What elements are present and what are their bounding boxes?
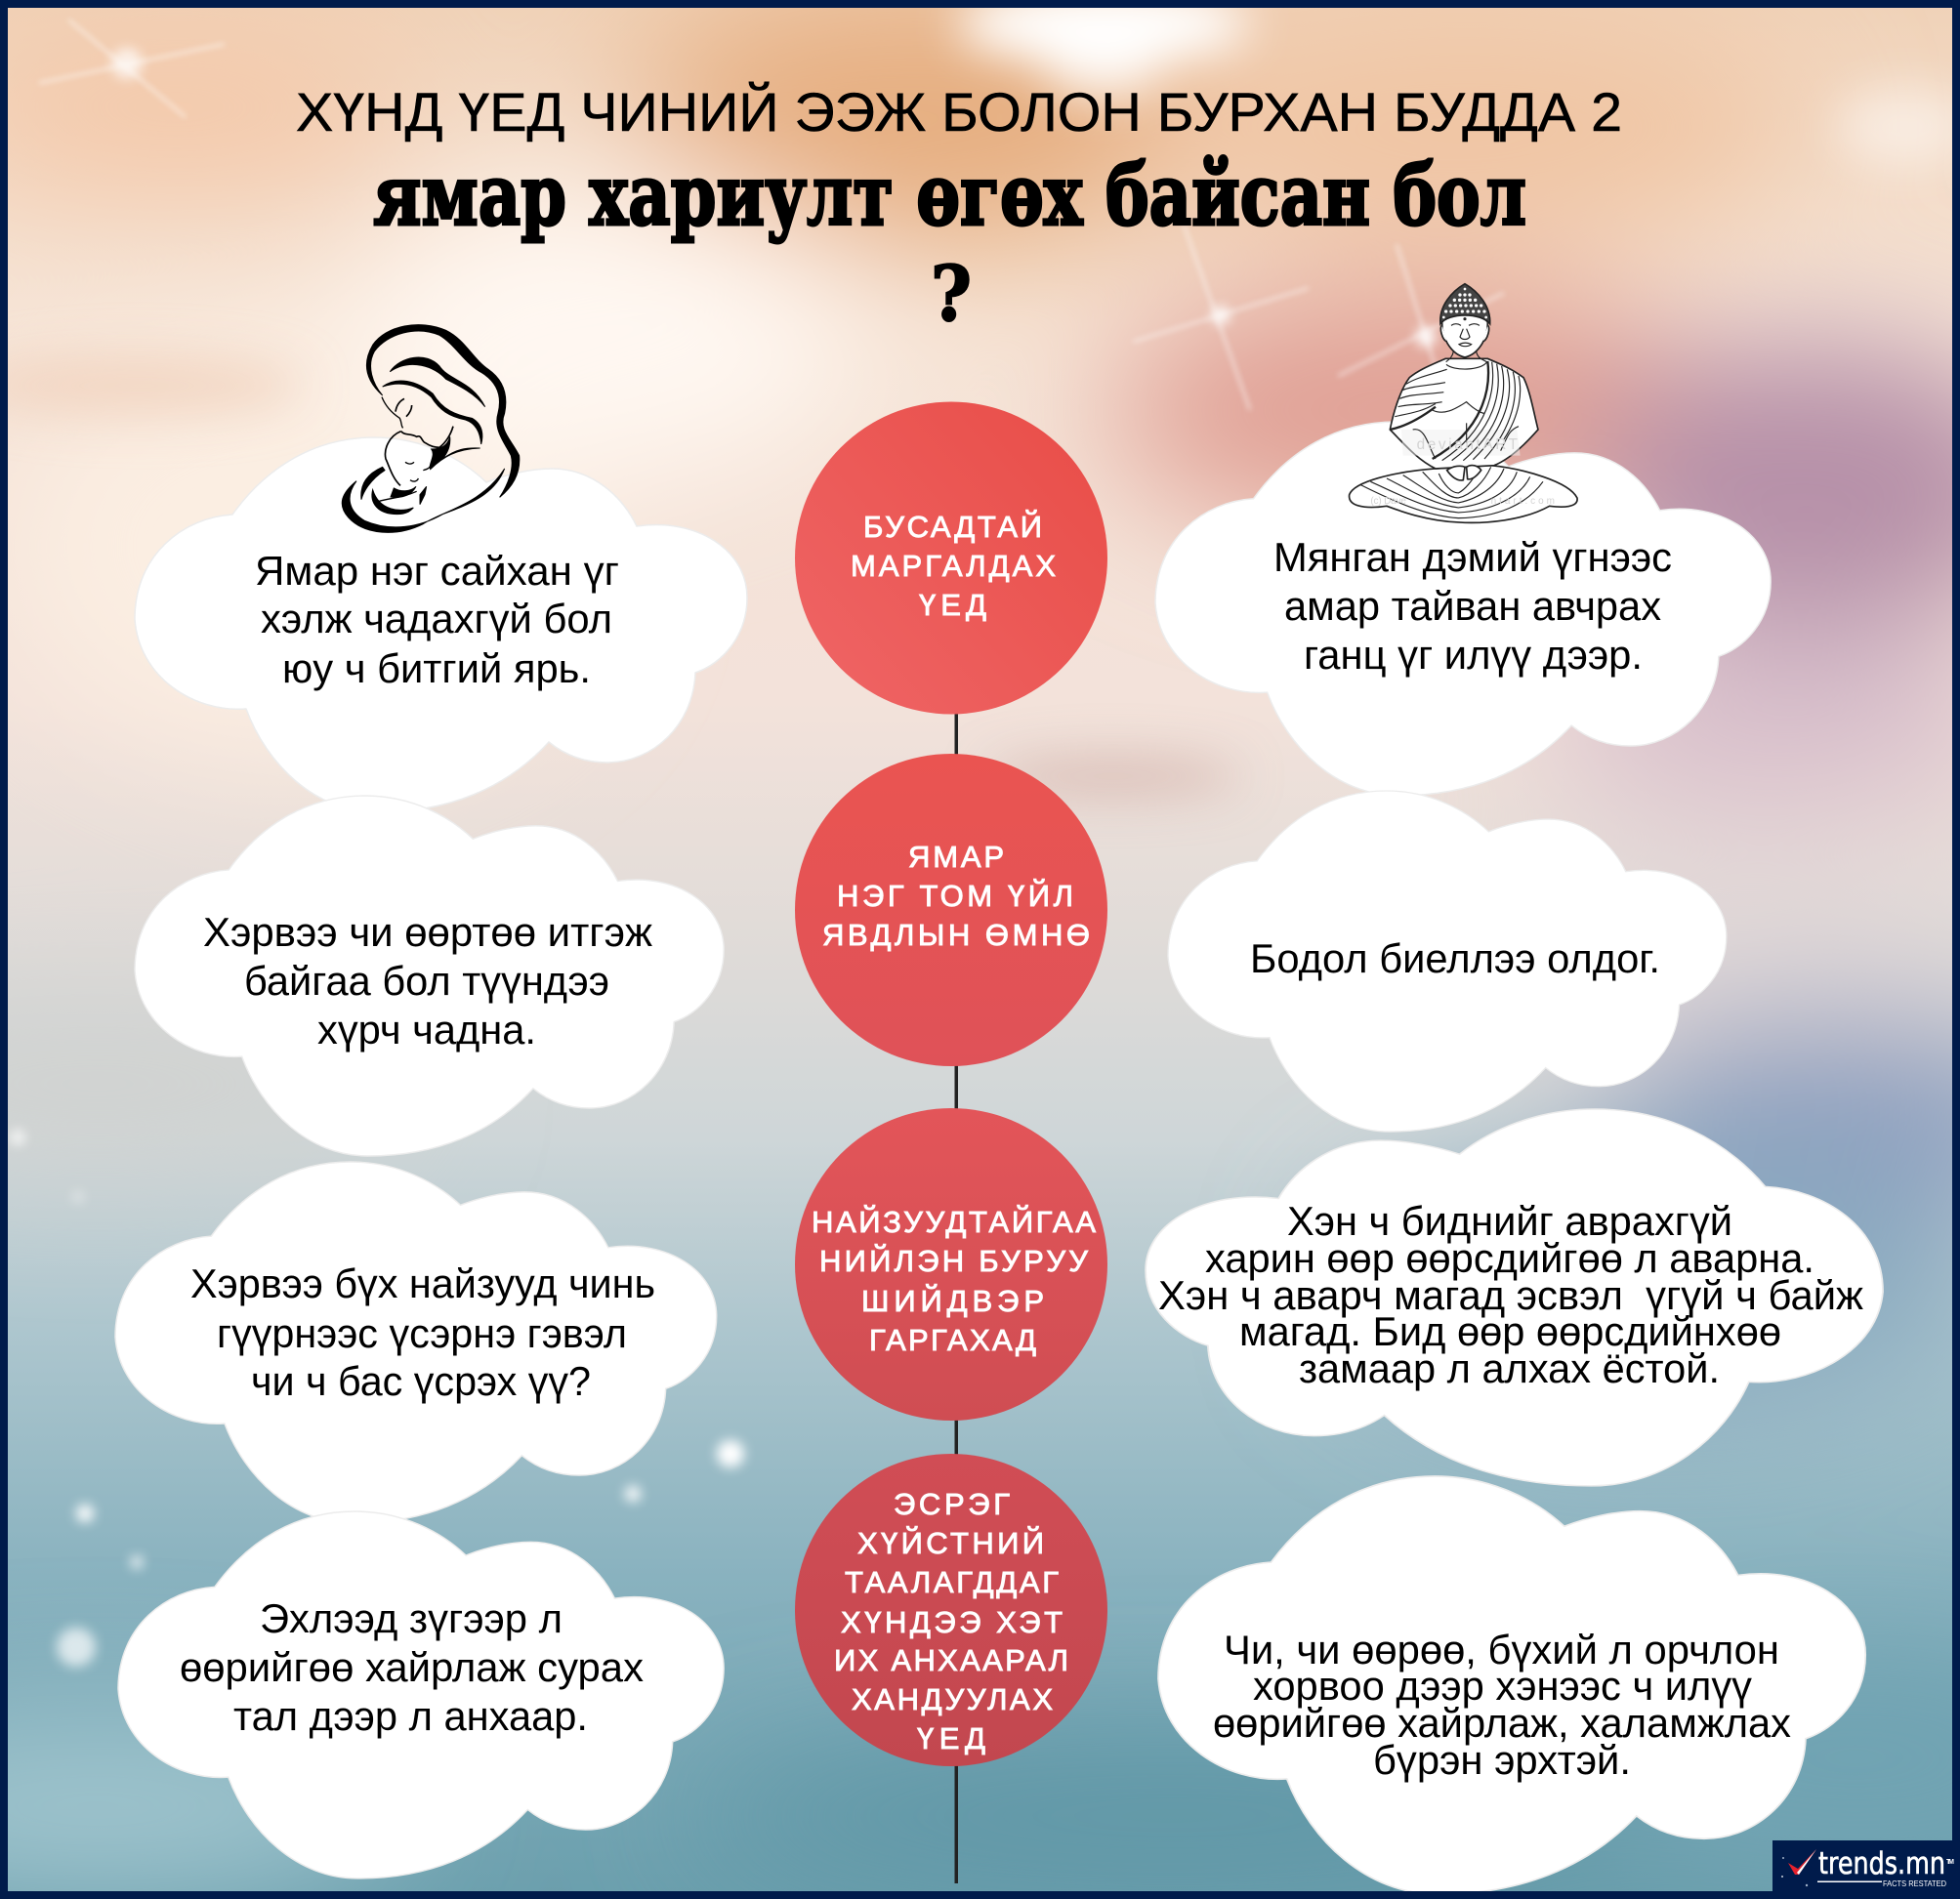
text: right cloud 4: Чи, чи өөрөө, бүхий л орчлон [1224, 1627, 1779, 1672]
logo: trends.mn: TM [1946, 1859, 1954, 1866]
red circle 4: ХҮНДЭЭ ХЭТ [841, 1605, 1063, 1639]
icon part: lap folds [1360, 467, 1543, 518]
red circle 3: ГАРГАХАД [869, 1323, 1036, 1357]
red circle 2: ЯВДЛЫН ӨМНӨ [822, 918, 1090, 952]
title line 1: ХҮНД ҮЕД ЧИНИЙ ЭЭЖ БОЛОН БУРХАН БУДДА 2 [296, 81, 1622, 143]
icon part: robe stripes [1390, 361, 1521, 461]
text: left cloud 2: хүрч чадна. [317, 1007, 536, 1053]
watermark text: (c) Dave [1370, 496, 1406, 507]
text: right cloud 4: хорвоо дээр хэнээс ч илүү [1253, 1663, 1752, 1709]
text: right cloud 1: Мянган дэмий үгнээс [1273, 534, 1672, 580]
text: right cloud 1 [1273, 534, 1672, 678]
title line 2: ямар хариулт өгөх байсан бол [373, 146, 1526, 245]
text: right cloud 3: Хэн ч биднийг аврахгүй [1287, 1198, 1732, 1244]
red circle 3: ШИЙДВЭР [861, 1283, 1044, 1318]
text: right cloud 3: магад. Бид өөр өөрсдийнхөө [1239, 1308, 1781, 1354]
text: left cloud 3: гүүрнээс үсэрнэ гэвэл [217, 1310, 627, 1356]
watermark text [1370, 436, 1555, 507]
text: right cloud 3: замаар л алхах ёстой. [1299, 1345, 1720, 1391]
red circle 2 [795, 754, 1107, 1066]
red circle 2: ЯМАР [908, 840, 1004, 874]
cloud panel: right 3 [1146, 1109, 1883, 1486]
text: left cloud 4: тал дээр л анхаар. [233, 1693, 588, 1739]
text: right cloud 3 [1158, 1198, 1863, 1391]
text: left cloud 2: Хэрвээ чи өөртөө итгэж [203, 909, 652, 955]
red circle 4: ХАНДУУЛАХ [852, 1682, 1053, 1716]
red circle 4: ТААЛАГДДАГ [845, 1565, 1059, 1599]
watermark text: deviantART [1417, 436, 1519, 453]
text: left cloud 4 [180, 1595, 644, 1739]
cloud panel: left 3 [115, 1162, 717, 1523]
text: right cloud 4 [1213, 1627, 1791, 1783]
text: right cloud 4: бүрэн эрхтэй. [1373, 1737, 1631, 1783]
cloud panel: left 4 [118, 1511, 724, 1878]
text: left cloud 3 [190, 1260, 655, 1404]
text: left cloud 1: хэлж чадахгүй бол [261, 596, 612, 641]
cloud panel: right 1 [1155, 422, 1771, 796]
text: left cloud 3: чи ч бас үсрэх үү? [251, 1358, 591, 1404]
red circle 1: ҮЕД [919, 588, 986, 622]
icon part: head [1442, 314, 1487, 357]
text: left cloud 2: байгаа бол түүндээ [244, 958, 609, 1004]
text: left cloud 3: Хэрвээ бүх найзууд чинь [190, 1260, 655, 1306]
watermark text: ntart.com [1491, 496, 1555, 507]
red circle 1 [795, 402, 1107, 715]
connector lines [955, 708, 958, 1883]
red circle 2: НЭГ ТОМ ҮЙЛ [837, 878, 1073, 913]
icon part: face [1446, 318, 1487, 362]
text: left cloud 2 [203, 909, 652, 1053]
red circle 4: ЭСРЭГ [894, 1487, 1010, 1521]
cloud panel: left 2 [135, 796, 724, 1156]
text: left cloud 1 [255, 548, 619, 691]
text: right cloud 1: амар тайван авчрах [1284, 583, 1661, 629]
icon part: hands [1447, 466, 1481, 480]
red circle 3: НАЙЗУУДТАЙГАА [812, 1204, 1096, 1239]
text: left cloud 1: Ямар нэг сайхан үг [255, 548, 619, 594]
icon part: seated legs [1350, 466, 1577, 522]
logo: trends.mn: FACTS RESTATED [1883, 1878, 1946, 1888]
logo: trends.mn [1772, 1840, 1960, 1899]
icon: meditating Buddha [1350, 284, 1577, 522]
icon part: torso and arms [1390, 358, 1538, 469]
cloud panel: left 1 [135, 437, 747, 812]
red circle 4: ҮЕД [917, 1721, 985, 1755]
red circle 4: ХҮЙСТНИЙ [857, 1525, 1044, 1560]
text: right cloud 4: өөрийгөө хайрлаж, халамжлах [1213, 1700, 1791, 1746]
cloud panel: right 2 [1168, 791, 1727, 1132]
red circle 4: ИХ АНХААРАЛ [834, 1643, 1068, 1677]
text: right cloud 3: харин өөр өөрсдийгөө л аварна. [1205, 1235, 1814, 1281]
icon: mother and baby [342, 325, 520, 532]
text: left cloud 4: Эхлээд зүгээр л [260, 1595, 563, 1641]
cloud panel: right 4 [1158, 1476, 1865, 1894]
red circle 1: МАРГАЛДАХ [851, 549, 1056, 583]
text: left cloud 4: өөрийгөө хайрлаж сурах [180, 1644, 644, 1690]
text: left cloud 1: юу ч битгий ярь. [282, 645, 591, 691]
text: right cloud 1: ганц үг илүү дээр. [1304, 632, 1643, 678]
red circle 3: НИЙЛЭН БУРУУ [819, 1243, 1088, 1278]
text: right cloud 2: Бодол биеллээ олдог. [1250, 935, 1660, 981]
red circle 3 [795, 1108, 1107, 1421]
title question mark: ? [931, 250, 972, 339]
text: right cloud 3: Хэн ч аварч магад эсвэл үгүй ч байж [1158, 1272, 1863, 1318]
red circle 1: БУСАДТАЙ [863, 509, 1042, 544]
red circle 4 [795, 1454, 1107, 1766]
